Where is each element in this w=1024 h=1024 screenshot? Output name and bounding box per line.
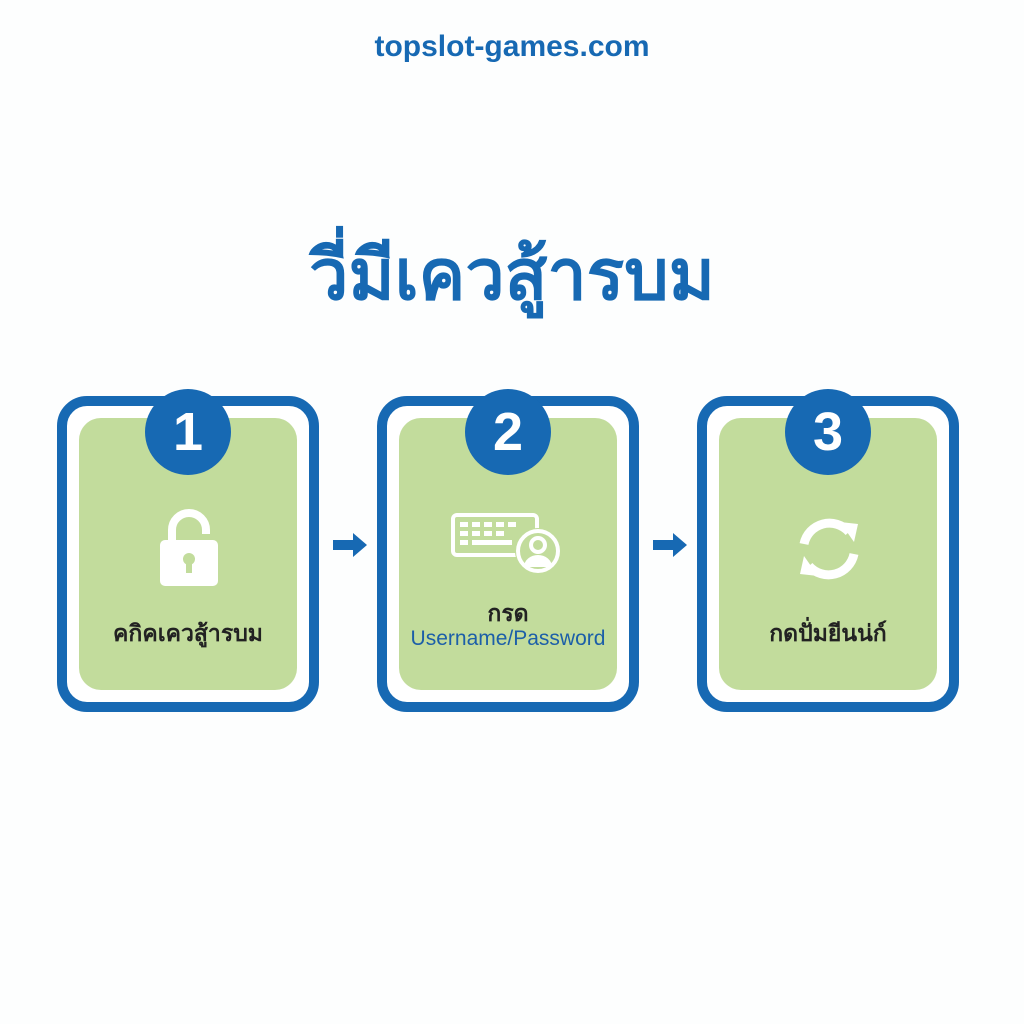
step number 3 (785, 389, 871, 475)
arrow 2 (653, 533, 687, 557)
card 3 (697, 396, 959, 712)
step number 2: 2 (493, 402, 523, 462)
step number 2 (465, 389, 551, 475)
site url: topslot-games.com (374, 30, 650, 63)
card 2 (377, 396, 639, 712)
card 2: Username/Password (411, 627, 605, 650)
step number 3: 3 (813, 402, 843, 462)
icon: refresh (800, 518, 858, 580)
step number 1: 1 (173, 402, 203, 462)
title: วี่มีเควสู้ารบม (309, 236, 715, 314)
icon: keyboard with user (451, 513, 560, 573)
label: คกิคเควสู้ารบม (113, 620, 263, 646)
icon: padlock (160, 509, 218, 586)
card 1 (57, 396, 319, 712)
label: กดปั่มยีนน่ก์ (769, 620, 887, 646)
arrow 1 (333, 533, 367, 557)
label: กรด (487, 600, 529, 626)
step number 1 (145, 389, 231, 475)
